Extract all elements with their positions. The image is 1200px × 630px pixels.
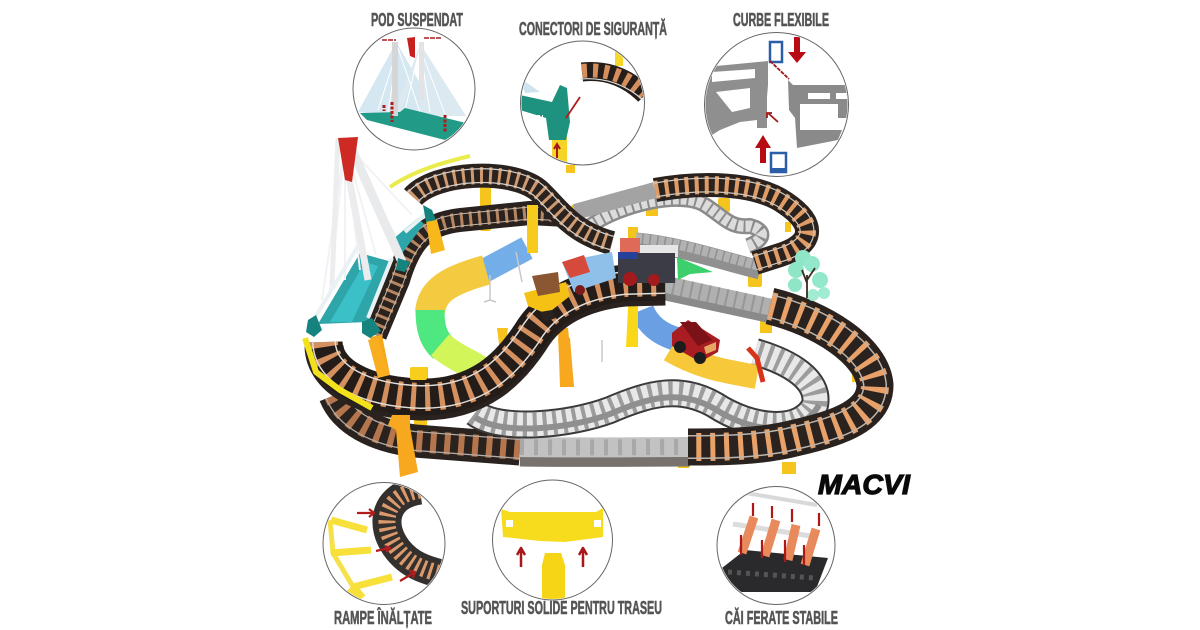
train (524, 238, 713, 322)
yellow ramp guard (305, 338, 372, 408)
yellow support feet and back pillars (413, 165, 858, 474)
track: back second brown section (369, 201, 558, 340)
track: upper gray straight (575, 190, 655, 212)
panel: rampe înălțate detail circle (323, 482, 445, 604)
track: outer right brown curve (688, 288, 894, 466)
title: căi ferate stabile: CĂI FERATE STABILE (725, 607, 838, 628)
orange front pillars (368, 338, 574, 477)
brand mark: macvi: MACVI (818, 469, 911, 500)
panel: conectori de siguranță detail circle (520, 41, 645, 165)
panel: curbe flexibile detail circle (704, 32, 848, 176)
road signs (484, 252, 602, 362)
track: rear outer brown left (320, 396, 520, 466)
illustration: toy train track set (302, 137, 894, 477)
track: front gray straight right (664, 284, 770, 311)
panel: suporturi solide detail circle (492, 480, 612, 600)
title: pod suspendat: POD SUSPENDAT (371, 10, 463, 30)
track: bottom gray ribbon (475, 352, 819, 429)
track: bottom gray straight (520, 447, 690, 452)
track: back gray curved section (590, 199, 761, 246)
track: upper curved brown section (404, 164, 615, 254)
tree (788, 250, 830, 301)
flexible track: blue and yellow with red connector (642, 310, 763, 382)
front pillars (370, 205, 638, 387)
track: upper middle gray straight (636, 238, 760, 270)
panel: căi ferate stabile detail circle (717, 486, 835, 604)
flexible track: blue, yellow, green and lime (430, 248, 527, 376)
suspension bridge (306, 137, 470, 338)
title: conectori de siguranță: CONECTORI DE SIGURANȚĂ (519, 18, 667, 39)
title: curbe flexibile: CURBE FLEXIBILE (733, 10, 829, 30)
track: upper right brown curve (652, 173, 820, 274)
track: front main loop (304, 265, 666, 420)
title: rampe înălțate: RAMPE ÎNĂLȚATE (334, 607, 432, 628)
panel: pod suspendat detail circle (353, 28, 475, 150)
red toy car (672, 320, 720, 364)
title: suporturi solide pentru traseu: SUPORTURI SOLIDE PENTRU TRASEU (461, 598, 662, 618)
